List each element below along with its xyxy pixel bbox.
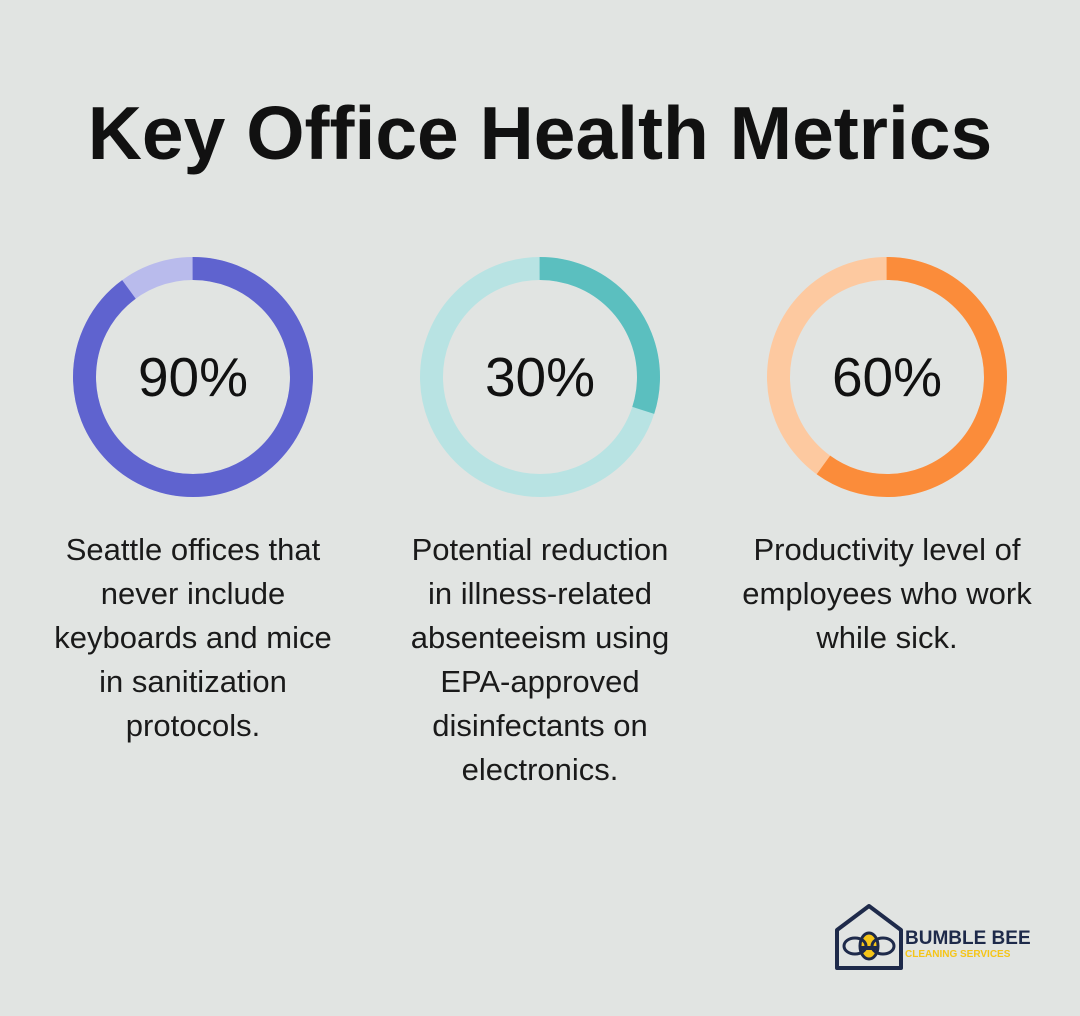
logo [835,904,1031,970]
title: Key Office Health Metrics [88,91,992,175]
text: 30% description: disinfectants on [432,708,648,743]
text: 90% description: keyboards and mice [54,620,332,655]
text: 60% description: Productivity level of [753,532,1021,567]
value: 90%: 90% [138,346,248,408]
donut: 30% [420,257,660,497]
text: 30% description: electronics. [462,752,618,787]
text: 30% description [411,532,669,787]
text: 60% description [742,532,1032,655]
text: 90% description: never include [101,576,285,611]
value: 30%: 30% [485,346,595,408]
text: tagline: CLEANING SERVICES [905,949,1010,960]
text: 60% description: employees who work [742,576,1032,611]
text: 30% description: in illness-related [428,576,652,611]
text: 90% description: in sanitization [99,664,287,699]
text: 60% description: while sick. [816,620,958,655]
text: 30% description: Potential reduction [412,532,668,567]
text: 30% description: EPA-approved [440,664,640,699]
text: 30% description: absenteeism using [411,620,669,655]
value: 60%: 60% [832,346,942,408]
text: 90% description [54,532,332,743]
donut: 60% [767,257,1007,497]
icon: bee house [835,904,903,970]
donut: 90% [73,257,313,497]
text: 90% description: Seattle offices that [66,532,320,567]
text: brand name: BUMBLE BEE [905,928,1031,949]
text: 90% description: protocols. [126,708,260,743]
